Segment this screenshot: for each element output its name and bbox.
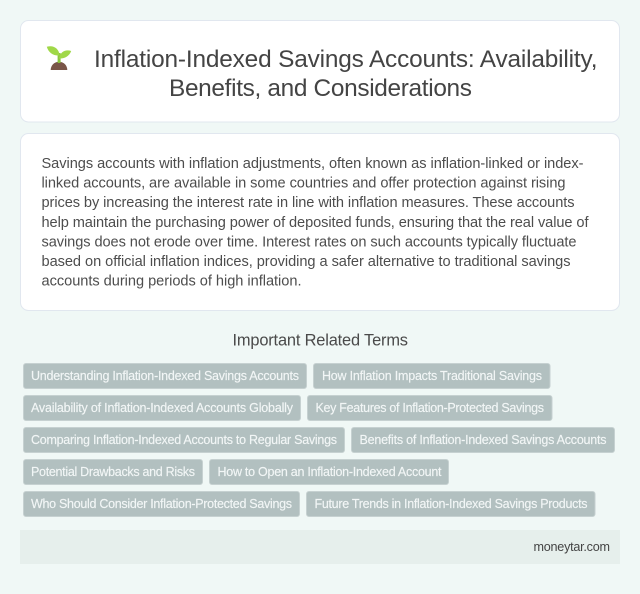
tag xyxy=(314,364,550,388)
tag xyxy=(24,396,300,420)
description text: savings does not erode over time. Interest rates on such accounts typically fluctuate xyxy=(42,234,576,250)
title xyxy=(94,46,598,102)
description text: accounts during periods of high inflation. xyxy=(42,274,302,290)
footer bar xyxy=(20,530,620,564)
description text: prices by increasing the interest rate in line with inflation measures. These accounts xyxy=(42,195,574,211)
tag: Benefits of Inflation-Indexed Savings Accounts xyxy=(360,433,606,447)
tag xyxy=(24,492,300,516)
description text: Savings accounts with inflation adjustments, often known as inflation-linked or index- xyxy=(42,156,584,172)
tag: Potential Drawbacks and Risks xyxy=(31,465,195,479)
tag: How to Open an Inflation-Indexed Account xyxy=(218,465,442,479)
description text: based on official inflation indices, providing a safer alternative to traditional savings xyxy=(42,254,570,270)
footer source: moneytar.com xyxy=(534,540,610,554)
panel: title card xyxy=(20,20,620,122)
tag: Understanding Inflation-Indexed Savings Accounts xyxy=(31,369,299,383)
tag: Future Trends in Inflation-Indexed Savings Products xyxy=(314,497,588,511)
tag: Key Features of Inflation-Protected Savings xyxy=(316,401,544,415)
tag: Comparing Inflation-Indexed Accounts to Regular Savings xyxy=(31,433,337,447)
tag xyxy=(24,428,344,452)
tag xyxy=(306,492,595,516)
description text: linked accounts, are available in some countries and offer protection against rising xyxy=(42,176,566,192)
tag xyxy=(308,396,552,420)
title: Inflation-Indexed Savings Accounts: Availability, xyxy=(94,46,598,73)
tag: Availability of Inflation-Indexed Accounts Globally xyxy=(31,401,294,415)
tag xyxy=(210,460,448,484)
icon: sprout xyxy=(47,46,71,70)
tag: How Inflation Impacts Traditional Savings xyxy=(322,369,542,383)
title: Benefits, and Considerations xyxy=(169,75,472,102)
panel: description xyxy=(20,134,620,310)
tag xyxy=(24,460,202,484)
tag xyxy=(24,364,306,388)
tag list xyxy=(24,364,614,516)
description text: help maintain the purchasing power of deposited funds, ensuring that the real value of xyxy=(42,215,589,231)
description text xyxy=(42,156,589,290)
tag xyxy=(352,428,614,452)
heading: related terms: Important Related Terms xyxy=(232,332,408,350)
tag: Who Should Consider Inflation-Protected Savings xyxy=(31,497,292,511)
